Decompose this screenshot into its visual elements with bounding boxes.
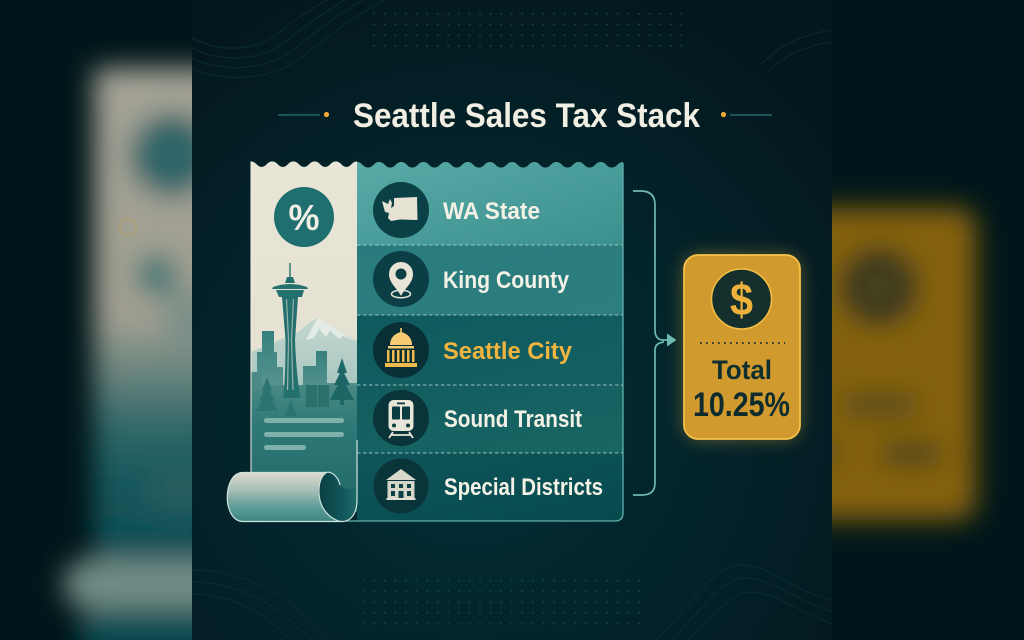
row: King County (357, 245, 623, 315)
illustration: trees (256, 377, 278, 411)
row: Special Districts: Special Districts (444, 474, 603, 501)
icon: dollar coin: $ (730, 274, 753, 325)
blurred right backdrop (790, 208, 976, 520)
illustration: space needle (272, 263, 308, 398)
title: Seattle Sales Tax Stack (353, 97, 700, 135)
receipt curl (227, 440, 357, 522)
total card (684, 255, 800, 439)
total card: 10.25% (693, 386, 790, 424)
illustration: skyline (257, 331, 283, 385)
row: Sound Transit (357, 385, 623, 453)
icon: percent badge: % (288, 197, 320, 238)
total card: Total (712, 355, 772, 385)
row: Sound Transit: Sound Transit (444, 406, 582, 433)
row: King County: King County (443, 267, 570, 294)
center panel (192, 0, 832, 640)
panel: paper receipt strip (227, 160, 357, 522)
blurred left backdrop (48, 48, 192, 640)
arrow: bracket to total (633, 191, 676, 495)
row: Special Districts (357, 453, 623, 521)
row: WA State: WA State (443, 198, 540, 225)
panel: receipt tax rows (340, 162, 623, 521)
illustration: mountain (251, 318, 357, 385)
icon: dollar coin (712, 269, 772, 329)
icon: percent badge (274, 187, 334, 247)
row: Seattle City: Seattle City (443, 338, 573, 365)
row: Seattle City (357, 315, 623, 385)
row: WA State (357, 162, 623, 245)
receipt lines (264, 418, 344, 450)
